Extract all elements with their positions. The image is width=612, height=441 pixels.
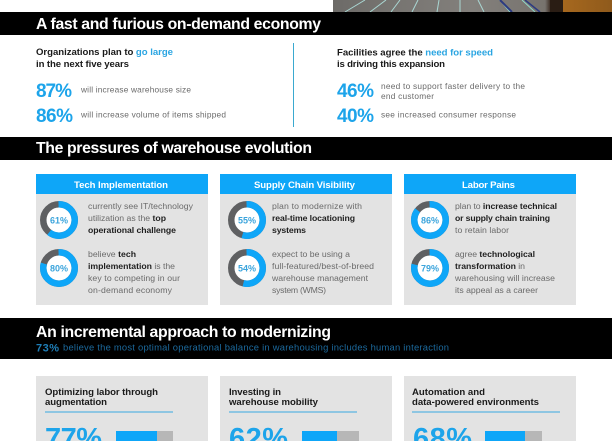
card: automation (404, 376, 576, 441)
text: 86 percent (455, 201, 557, 235)
band: incremental approach heading: 73% (36, 342, 59, 354)
stat: 46 percent: 46% (337, 81, 374, 102)
text: 54 percent: full-featured/best-of-breed (272, 261, 374, 271)
bar: 62 percent (302, 431, 359, 441)
card: optimizing labor: Optimizing labor through (45, 387, 158, 398)
stat: 86 percent: will increase volume of items shipped (80, 110, 226, 120)
text: 54 percent: system (WMS) (272, 285, 326, 295)
text: 79 percent: transformation in (455, 261, 525, 271)
stat: 46 percent: need to support faster delivery to the (381, 81, 525, 91)
text: 80 percent: on-demand economy (88, 285, 173, 295)
text: 55 percent: real-time locationing (272, 213, 355, 223)
donut: 86 percent: 86% (421, 216, 439, 226)
stat: 87 percent: will increase warehouse size (80, 84, 191, 94)
band: incremental approach heading: believe the most optimal operational balance in warehousing includes human interaction (63, 342, 449, 352)
stat: 86 percent (36, 106, 226, 127)
card: warehouse mobility: warehouse mobility (228, 397, 319, 408)
band: incremental approach heading (0, 318, 612, 359)
donut: 61 percent: 61% (50, 216, 68, 226)
heading: need for speed (337, 48, 493, 70)
panel: labor pains: Labor Pains (462, 180, 515, 191)
text: 61 percent: currently see IT/technology (88, 201, 194, 211)
stat: 86 percent: 86% (36, 106, 73, 127)
heading: need for speed: is driving this expansion (337, 59, 445, 70)
donut: 54 percent: 54% (238, 264, 256, 274)
text: 80 percent: key to competing in our (88, 273, 180, 283)
heading: go large: in the next five years (36, 59, 129, 70)
donut: 80 percent: 80% (50, 264, 68, 274)
text: 80 percent: implementation is the (88, 261, 175, 271)
band: incremental approach heading: An incremental approach to modernizing (36, 324, 331, 341)
text: 79 percent: its appeal as a career (455, 285, 538, 295)
text: 79 percent (454, 249, 555, 295)
panel: supply chain visibility: Supply Chain Visibility (254, 180, 356, 191)
text: 54 percent (271, 249, 374, 295)
band: on-demand economy heading (0, 12, 612, 35)
card: automation: data-powered environments (412, 397, 539, 408)
stat: 46 percent: end customer (381, 91, 434, 101)
text: 86 percent: or supply chain training (455, 213, 550, 223)
stat: 46 percent (337, 81, 525, 102)
text: 55 percent (272, 201, 362, 235)
bar: 77 percent (116, 431, 173, 441)
bar: 68 percent (485, 431, 542, 441)
stat: 40 percent (337, 106, 516, 127)
text: 86 percent: plan to increase technical (455, 201, 557, 211)
donut: 55 percent: 55% (238, 216, 256, 226)
panel: tech implementation (36, 174, 208, 305)
heading: go large: Organizations plan to go large (36, 47, 173, 58)
card: warehouse mobility: Investing in (229, 387, 281, 398)
text: 80 percent (88, 249, 180, 295)
stat: 40 percent: 40% (337, 106, 374, 127)
text: 61 percent (88, 201, 194, 235)
donut: 79 percent (411, 249, 449, 287)
photo: warehouse floor (333, 0, 612, 12)
donut: 79 percent: 79% (421, 264, 439, 274)
panel: labor pains (404, 174, 576, 305)
card: warehouse mobility (220, 376, 392, 441)
stat: 40 percent: see increased consumer response (381, 110, 516, 120)
text: 79 percent: warehousing will increase (454, 273, 555, 283)
card: automation: Automation and (412, 387, 485, 398)
donut: 55 percent (228, 201, 266, 239)
stat: 87 percent (36, 81, 191, 102)
band: on-demand economy heading: A fast and furious on-demand economy (36, 16, 321, 33)
heading: go large (36, 47, 173, 70)
text: 80 percent: believe tech (88, 249, 136, 259)
band: pressures heading (0, 137, 612, 160)
donut: 86 percent (411, 201, 449, 239)
donut: 80 percent (40, 249, 78, 287)
donut: 54 percent (228, 249, 266, 287)
text: 55 percent: systems (272, 225, 306, 235)
donut: 61 percent (40, 201, 78, 239)
heading: need for speed: Facilities agree the need for speed (337, 48, 493, 58)
text: 54 percent: warehouse management (271, 273, 369, 283)
panel: go large (36, 47, 226, 127)
stat: 87 percent: 87% (36, 81, 72, 102)
text: 61 percent: operational challenge (88, 225, 176, 235)
card: optimizing labor: augmentation (45, 397, 107, 408)
panel: need for speed (337, 48, 525, 127)
text: 54 percent: expect to be using a (272, 249, 350, 259)
text: 79 percent: agree technological (455, 249, 535, 259)
panel: tech implementation: Tech Implementation (74, 180, 168, 191)
panel: supply chain visibility (220, 174, 392, 305)
text: 61 percent: utilization as the top (88, 213, 166, 223)
band: pressures heading: The pressures of warehouse evolution (36, 140, 312, 157)
text: 55 percent: plan to modernize with (272, 201, 362, 211)
text: 86 percent: to retain labor (455, 225, 509, 235)
card: optimizing labor (36, 376, 208, 441)
